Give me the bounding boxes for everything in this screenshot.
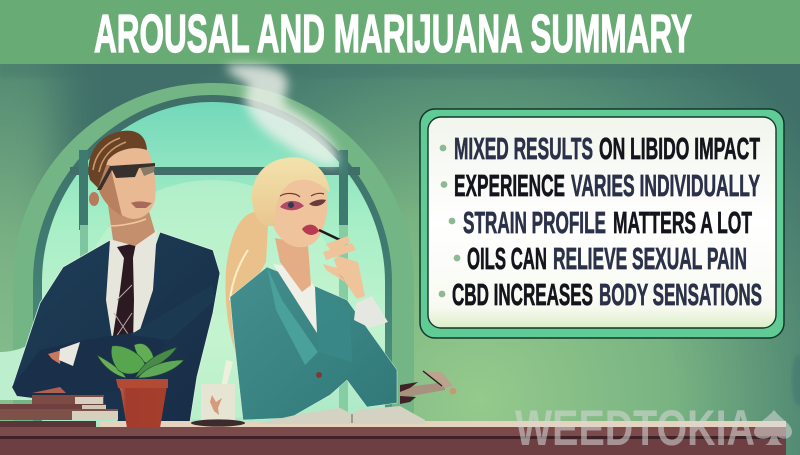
woman hair (252, 157, 330, 226)
mug on saucer (191, 360, 245, 427)
bullet 1: MIXED RESULTS (454, 131, 593, 166)
woman lips (302, 225, 319, 235)
man face (97, 146, 156, 219)
stack of books (0, 387, 118, 427)
man neck (108, 205, 155, 246)
woman eyes (280, 193, 326, 210)
woman cuff (354, 296, 388, 328)
smoke (226, 64, 338, 166)
man crossed arms (12, 285, 215, 398)
woman neck (275, 238, 311, 292)
desk (0, 421, 786, 455)
title banner (0, 0, 800, 64)
potted plant (97, 343, 184, 428)
open book (260, 406, 425, 424)
woman shirt (273, 264, 317, 333)
man (12, 131, 220, 422)
woman raised hand (323, 236, 365, 299)
bullet 2: EXPERIENCE (454, 168, 565, 203)
bullet 4: OILS CAN (467, 241, 547, 276)
spade icon (754, 410, 792, 445)
plant leaves (97, 343, 184, 378)
arched window (0, 83, 414, 430)
man suit (12, 232, 220, 422)
woman jacket (230, 267, 397, 420)
man glasses (97, 163, 155, 190)
bullet 2 (441, 168, 760, 203)
man ear (89, 192, 99, 206)
woman ponytail (226, 212, 268, 358)
plant pot (116, 379, 168, 428)
bullet 5: CBD INCREASES (452, 277, 593, 312)
summary panel (420, 109, 784, 338)
man shirt and tie (106, 230, 157, 345)
woman face (270, 172, 328, 247)
bullet 4 (454, 241, 747, 276)
bullet 3: STRAIN PROFILE (463, 205, 606, 240)
man hair (88, 131, 147, 188)
woman (226, 157, 397, 420)
pen (319, 230, 340, 240)
gavel handle (400, 371, 456, 404)
